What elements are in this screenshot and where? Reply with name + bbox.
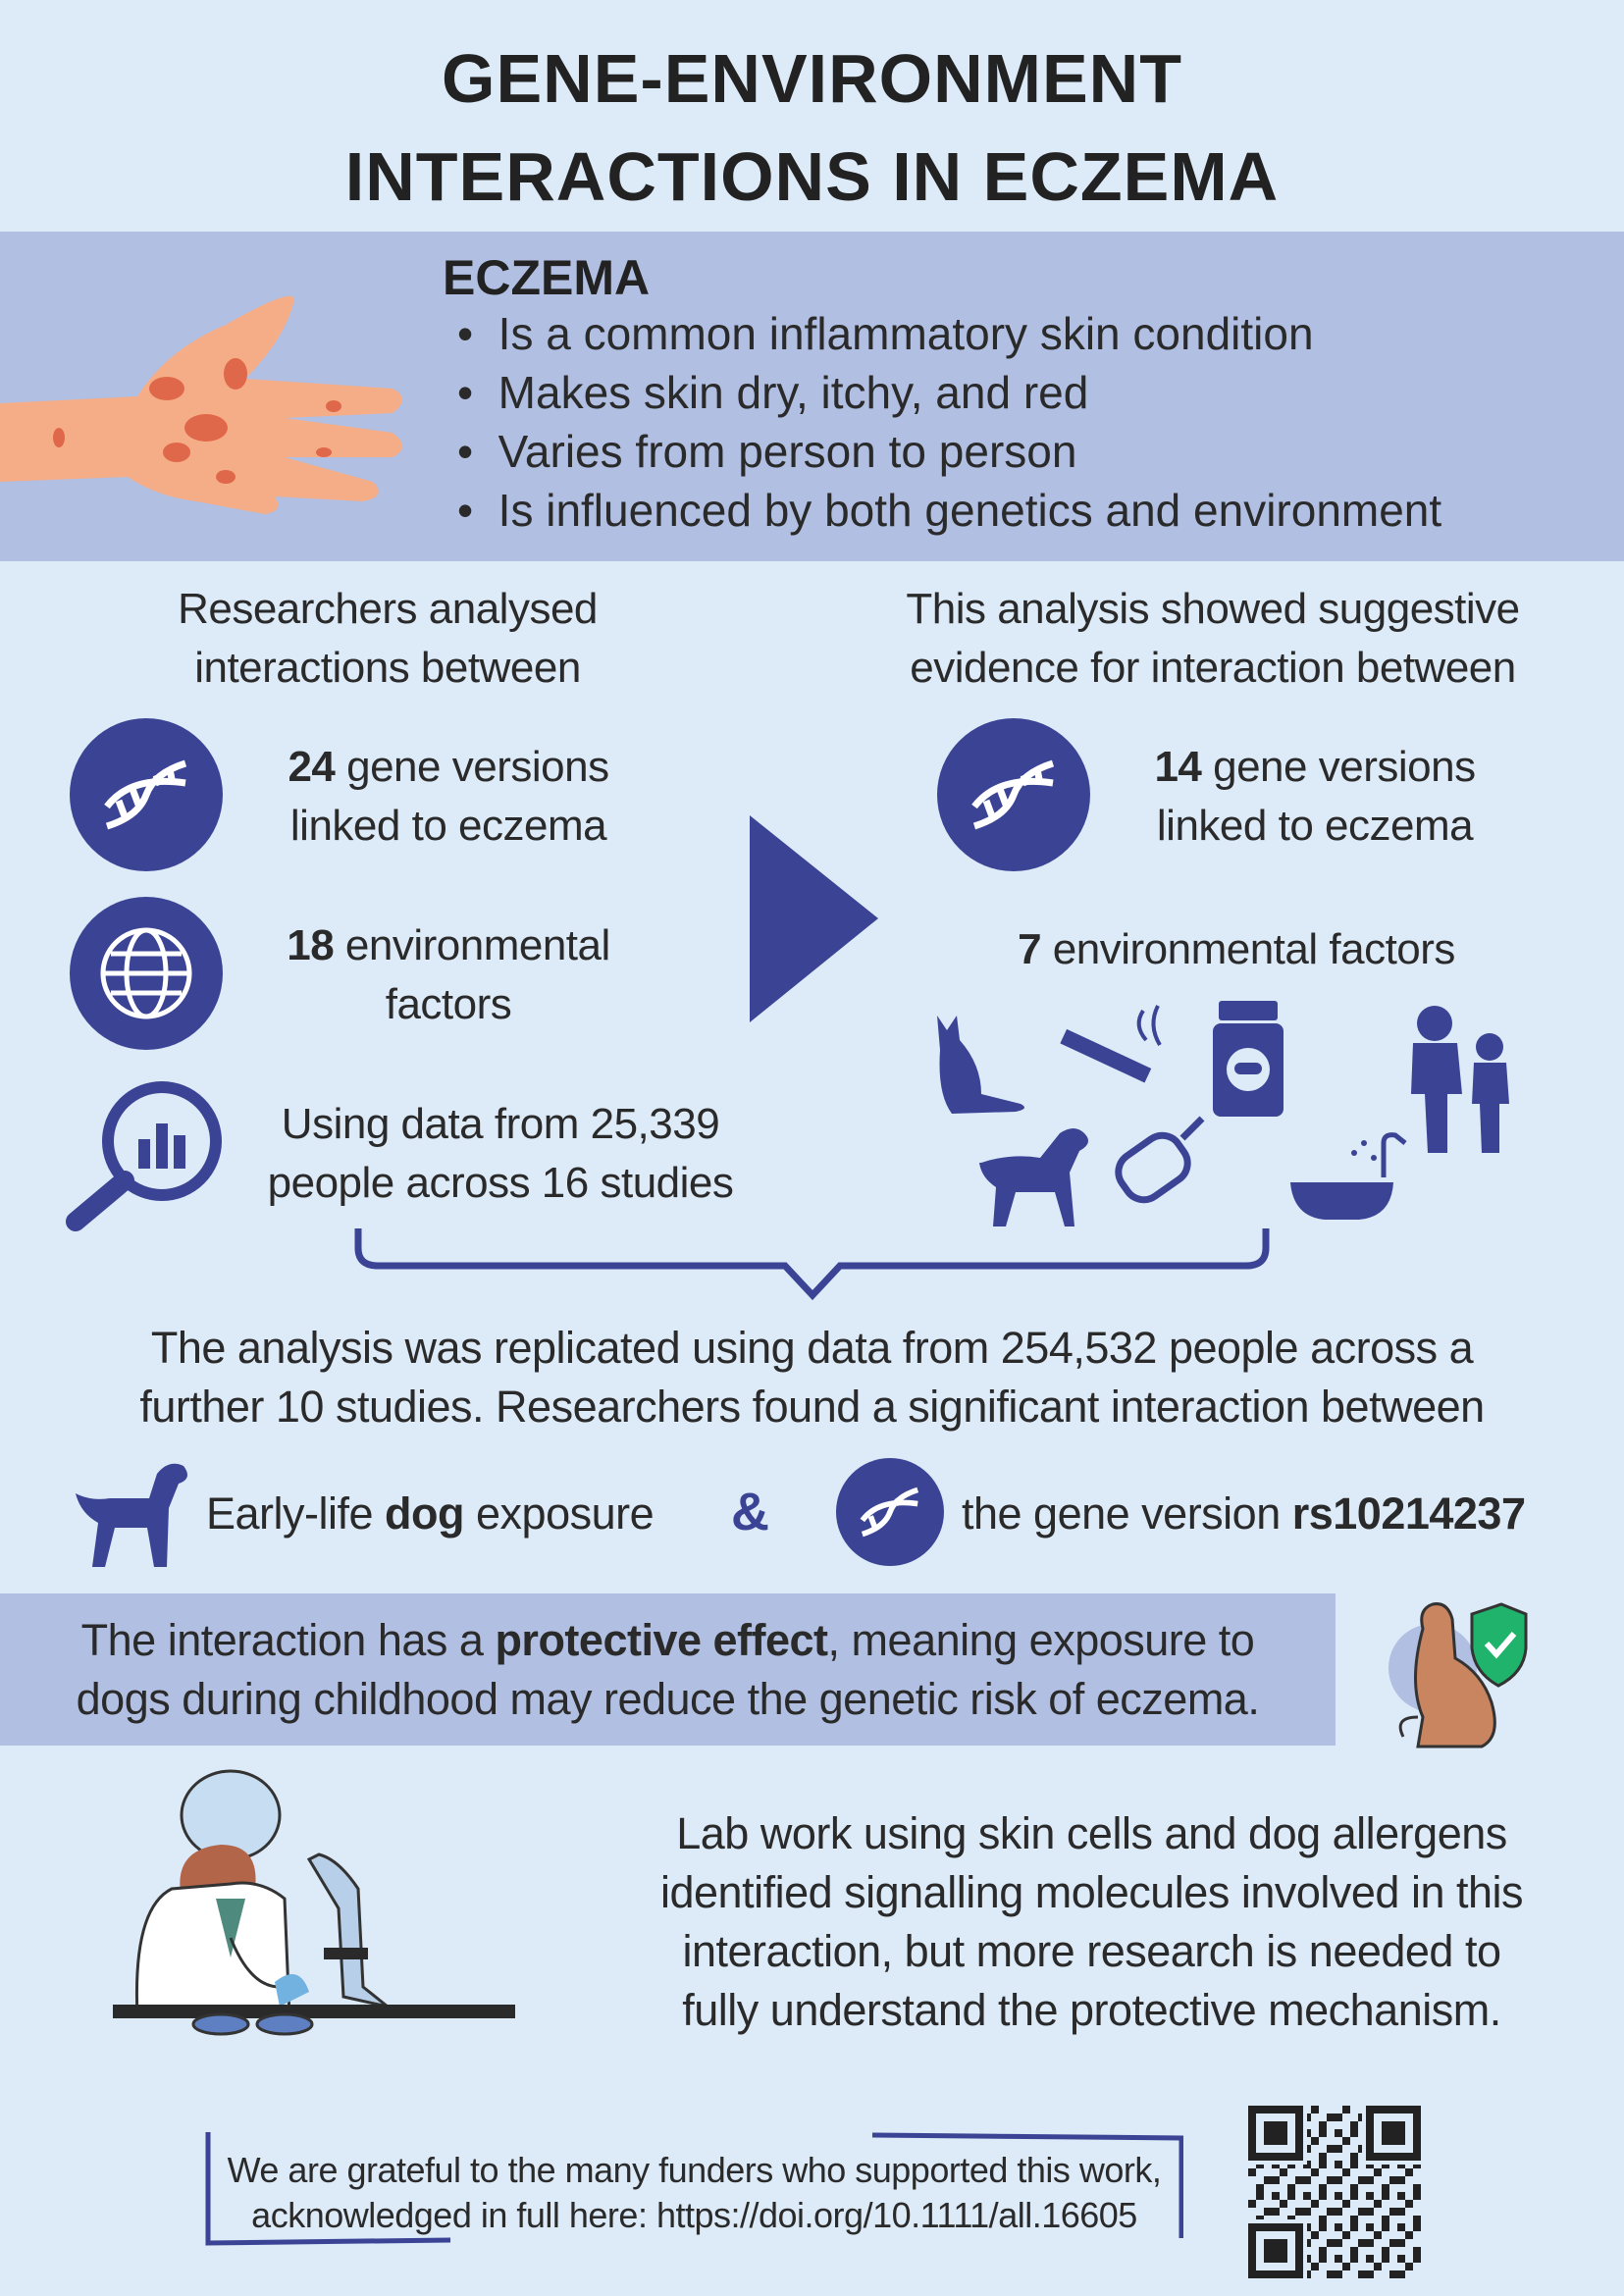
panel: eczema intro band <box>0 232 1624 561</box>
icon: dog <box>979 1128 1088 1226</box>
text block: 7 environmental factors: 7 environmental factors <box>1018 925 1455 973</box>
icon: baby bottle <box>1111 1119 1202 1208</box>
text block: 18 environmental factors: factors <box>386 980 511 1028</box>
text block: replication: The analysis was replicated using data from 254,532 people across a <box>151 1323 1473 1373</box>
text block: 14 gene versions: linked to eczema <box>1157 802 1473 850</box>
text block: lab work <box>660 1808 1523 2035</box>
callout: protective effect <box>0 1593 1336 1746</box>
icon: DNA small circle <box>836 1458 944 1566</box>
icon: bathtub <box>1290 1135 1405 1220</box>
arrow: triangle <box>750 815 878 1022</box>
text block: 24 gene versions: linked to eczema <box>290 802 606 850</box>
text block: lab work: identified signalling molecules involved in this <box>660 1867 1523 1917</box>
text block: 18 environmental factors: 18 environmental <box>287 921 610 969</box>
text block: gene version: the gene version rs10214237 <box>962 1488 1525 1539</box>
text block: eczema bullets: • Varies from person to person <box>457 426 1076 477</box>
text block: replication <box>139 1323 1485 1432</box>
icon: dog <box>76 1464 187 1567</box>
text block: eczema bullets: • Is a common inflammatory skin condition <box>457 308 1314 359</box>
text block: researchers analysed: interactions between <box>194 644 581 692</box>
text: ampersand: & <box>731 1483 769 1541</box>
icon: children <box>1411 1006 1509 1153</box>
text block: using data: people across 16 studies <box>268 1159 733 1207</box>
QR code <box>1248 2106 1421 2278</box>
text block: analysis showed: evidence for interaction between <box>910 644 1516 692</box>
icon: cigarette <box>1060 1006 1160 1082</box>
text block: 14 gene versions: 14 gene versions <box>1154 743 1476 791</box>
text block: researchers analysed <box>178 585 598 692</box>
text block: 24 gene versions: 24 gene versions <box>288 743 609 791</box>
icon: globe circle <box>70 897 223 1050</box>
text block: using data: Using data from 25,339 <box>282 1100 719 1148</box>
text block: early-life dog exposure: Early-life dog exposure <box>206 1488 654 1539</box>
icon: DNA circle right <box>937 718 1090 871</box>
callout: protective effect: dogs during childhood may reduce the genetic risk of eczema. <box>77 1674 1259 1724</box>
icon: pill jar <box>1213 1001 1283 1117</box>
icon: DNA circle left <box>70 718 223 871</box>
brace <box>355 1228 1270 1300</box>
text block: 14 gene versions <box>1154 743 1476 850</box>
footer: funders acknowledgement: We are grateful to the many funders who supported this work, <box>228 2150 1161 2190</box>
icons: environmental factors <box>937 1001 1509 1226</box>
text block: replication: further 10 studies. Researchers found a significant interaction between <box>139 1382 1485 1432</box>
title: INTERACTIONS IN ECZEMA <box>345 138 1279 215</box>
text block: analysis showed: This analysis showed suggestive <box>906 585 1520 633</box>
title <box>345 40 1279 215</box>
text block: eczema bullets: • Makes skin dry, itchy, and red <box>457 367 1088 418</box>
text block: researchers analysed: Researchers analysed <box>178 585 598 633</box>
title: GENE-ENVIRONMENT <box>442 40 1182 117</box>
text block: lab work: fully understand the protective mechanism. <box>682 1985 1501 2035</box>
icon: cat <box>937 1016 1024 1114</box>
text block: lab work: Lab work using skin cells and dog allergens <box>676 1808 1507 1858</box>
icon: dog with shield <box>1388 1602 1527 1748</box>
text block: lab work: interaction, but more research is needed to <box>683 1926 1500 1976</box>
footer: funders acknowledgement <box>206 2132 1183 2245</box>
footer: funders acknowledgement: acknowledged in full here: https://doi.org/10.1111/all.16605 <box>251 2195 1137 2235</box>
text block: using data <box>268 1100 733 1207</box>
text block: analysis showed <box>906 585 1520 692</box>
text block: 18 environmental factors <box>287 921 610 1028</box>
text block: eczema bullets <box>457 308 1441 536</box>
text block: 24 gene versions <box>288 743 609 850</box>
icon: magnifier chart <box>66 1081 222 1231</box>
icon: hand with eczema <box>0 296 402 514</box>
text block: eczema bullets: • Is influenced by both genetics and environment <box>457 485 1441 536</box>
callout: protective effect: The interaction has a protective effect, meaning exposure to <box>81 1615 1254 1665</box>
icon: scientist with microscope <box>113 1770 515 2035</box>
heading: ECZEMA: ECZEMA <box>443 250 650 305</box>
